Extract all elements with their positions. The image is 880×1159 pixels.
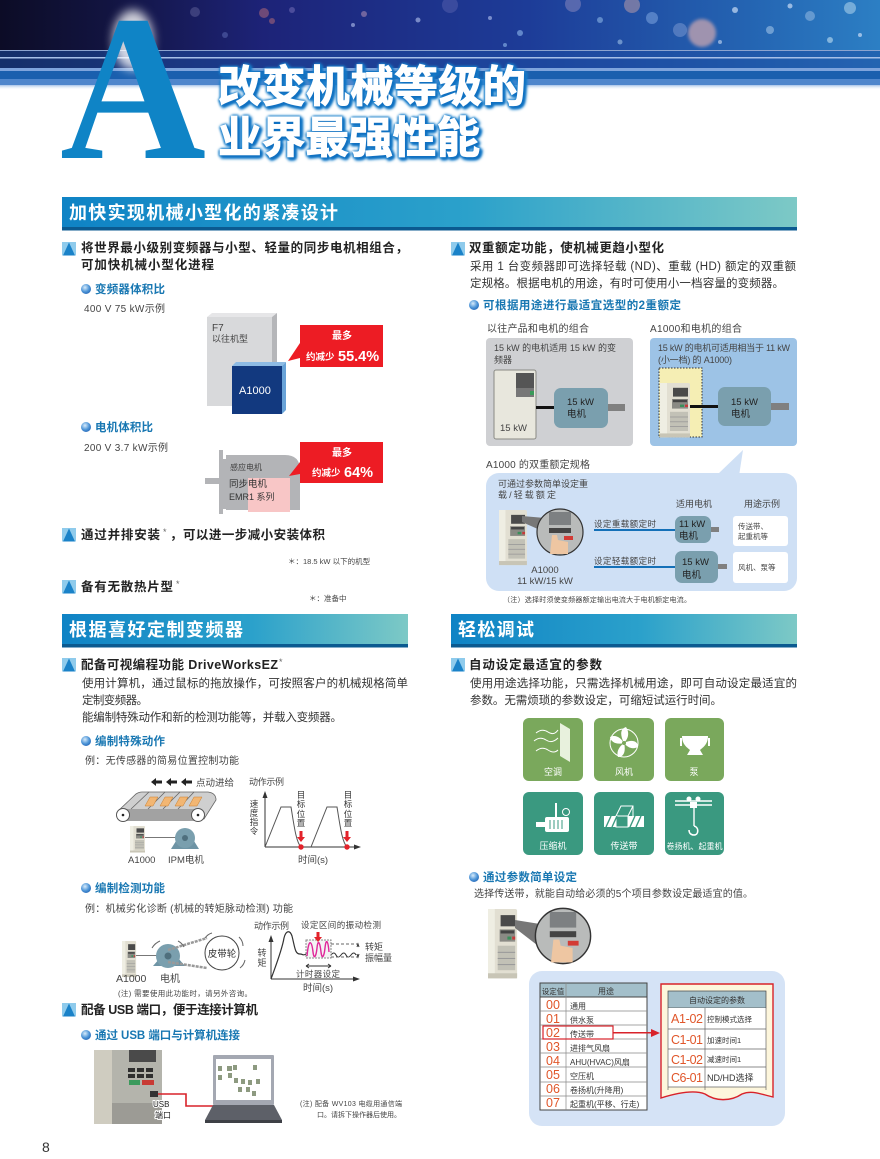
table: application: 通用 [570,1001,586,1011]
panel: A1000 dual rating spec: 15 kW [682,557,709,568]
panel: side by side mounting: ＊：18.5 kW 以下的机型 [288,556,371,566]
panel: conventional combination: 15 kW [500,423,527,434]
tile: crane: 卷扬机、起重机 [666,841,722,851]
illustration: USB connection: 端口 [155,1110,171,1120]
subheading: inverter volume: 变频器体积比 [95,282,166,296]
subheading: simple parameter setting [469,870,753,900]
panel: A1000 dual rating spec [486,450,797,591]
panel: world smallest inverter: 将世界最小级别变频器与小型、轻量的同步电机相组合， [81,240,408,255]
chart: torque detection: 转 [257,947,267,958]
chart: torque detection: 计时器设定 [296,969,340,979]
chart: motor volume comparison [205,450,300,514]
panel: DriveWorksEZ: 定制变频器。 [82,693,148,707]
panel: conventional combination: 频器 [494,354,512,365]
subheading: simple parameter setting: 选择传送带，就能自动给必须的5个项目参数设定最适宜的值。 [474,887,753,900]
panel: conventional combination: 15 kW 的电机适用 15 kW 的变 [494,342,616,353]
table: auto-set parameters: ND/HD选择 [707,1072,754,1083]
chart: speed profile: 目 [344,790,352,800]
table: auto-set parameters: C6-01 [671,1071,703,1085]
subheading: special motion [81,734,239,767]
panel: DriveWorksEZ: * [279,657,283,667]
callout: 64%: 64% [344,465,373,481]
panel: A1000 dual rating spec: 适用电机 [676,498,712,509]
panel: A1000 dual rating spec: 可通过参数简单设定重 [498,478,588,489]
subheading: special motion: 例：无传感器的简易位置控制功能 [85,754,239,767]
callout: 55.4% [288,325,383,367]
table: application: 设定值 [542,986,565,996]
panel: A1000 dual rating spec: 电机 [682,569,702,581]
chart: speed profile: 置 [344,818,353,828]
chart: torque detection: 时间(s) [303,982,333,994]
panel: A1000 dual rating spec: 11 kW/15 kW [517,576,573,587]
panel: no heatsink [62,579,346,603]
illustration: inverter keypad [488,908,591,978]
subheading: motor volume: 电机体积比 [95,420,154,434]
subheading: motor volume: 200 V 3.7 kW示例 [84,441,168,454]
subheading: inverter volume: 400 V 75 kW示例 [84,302,165,315]
diagram: conveyor: 点动进给 [196,777,235,789]
callout: 55.4%: 最多 [332,329,352,342]
panel: no heatsink: * [176,579,180,589]
panel: DriveWorksEZ: 使用计算机，通过鼠标的拖放操作，可按照客户的机械规格简单 [82,676,408,690]
table: application: 06 [546,1082,560,1096]
chart: speed profile: 指 [250,817,259,827]
panel: world smallest inverter: 可加快机械小型化进程 [81,257,214,272]
table: application: AHU(HVAC)风扇 [570,1057,630,1067]
panel: A1000 combination: A1000和电机的组合 [650,322,742,335]
title [218,64,526,163]
subheading: simple parameter setting: 通过参数简单设定 [483,870,578,884]
subheading: motor volume [81,420,168,454]
tile: compressor [523,792,583,855]
chart: speed profile: 位 [297,809,306,819]
chart: speed profile: 目 [297,790,305,800]
panel: world smallest inverter [62,240,408,272]
panel: dual rating heading [451,240,796,290]
table: application [540,983,647,1110]
section bar: easy setup: 轻松调试 [458,620,534,640]
subheading: special motion: 编制特殊动作 [95,734,166,748]
chart: speed profile: 置 [297,818,306,828]
title: 改变机械等级的 [218,64,526,112]
chart: speed profile: 标 [297,799,306,809]
table: auto-set parameters: 减速时间1 [707,1054,741,1064]
panel: A1000 combination: 15 kW 的电机可适用相当于 11 kW [658,342,790,353]
panel: A1000 dual rating spec: A1000 的双重额定规格 [486,458,590,471]
note: USB [300,1099,402,1119]
callout: 64%: 约减少 [312,467,341,479]
table: auto-set parameters: 加速时间1 [707,1035,741,1045]
table: application: 01 [546,1012,560,1026]
tile: pump [665,718,724,781]
chart: speed profile: 时间(s) [298,854,328,866]
subheading: dual rating: 可根据用途进行最适宜选型的2重额定 [483,298,682,312]
panel: A1000 dual rating spec: 11 kW [679,519,705,530]
illustration: USB connection [94,1050,282,1124]
page number: 8 [42,1139,50,1155]
diagram: conveyor [116,777,235,866]
header banner [0,0,880,90]
diagram: conveyor: A1000 [128,855,155,866]
tile: fan [594,718,654,781]
callout: 55.4%: 55.4% [338,349,379,365]
note: USB: (注) 配备 WV103 电缆用通信端 [300,1099,402,1108]
chart: speed profile: 位 [344,809,353,819]
panel: parameter tables [529,971,785,1126]
panel: auto parameter: 使用用途选择功能，只需选择机械用途，即可自动设定最适宜的 [470,676,797,690]
chart: inverter volume comparison: F7 [212,323,224,334]
subheading: detection: 例：机械劣化诊断 (机械的转矩脉动检测) 功能 [85,902,293,915]
highlight arrow [543,1026,660,1039]
table: auto-set parameters: 自动设定的参数 [689,995,745,1005]
table: application: 00 [546,998,560,1012]
panel: dual rating heading: 定规格。根据电机的用途，有时可使用小一档容量的变频器。 [470,276,784,290]
tile: conveyor: 传送带 [610,840,638,851]
panel: no heatsink: 备有无散热片型 [81,579,173,594]
tile: pump: 泵 [689,767,699,777]
subheading: detection [81,881,293,915]
chart: speed profile: 速 [250,799,259,809]
chart: torque detection: 动作示例 [254,920,289,931]
panel: DriveWorksEZ: 能编制特殊动作和新的检测功能等，并载入变频器。 [82,710,342,724]
illustration: USB connection: USB [153,1100,169,1109]
diagram: conveyor: IPM电机 [168,854,204,866]
table: application: 进排气风扇 [570,1043,610,1053]
chart: torque detection: 矩 [257,957,267,968]
subheading: inverter volume [81,282,166,315]
table: application: 传送带 [570,1029,594,1039]
table: auto-set parameters: C1-01 [671,1033,703,1047]
chart: speed profile: 标 [344,799,353,809]
table: auto-set parameters: 控制模式选择 [707,1014,752,1024]
panel: A1000 combination [650,322,797,446]
panel: A1000 dual rating spec: 传送带、 [738,521,768,531]
chart: speed profile: 度 [250,808,259,818]
chart: inverter volume comparison: 以往机型 [212,333,248,344]
panel: side by side mounting: ，可以进一步减小安装体积 [170,527,325,542]
tile: conveyor [594,792,654,855]
table: auto-set parameters [661,984,773,1100]
tile: air conditioning: 空调 [544,766,562,777]
diagram: motor and pulley: (注) 需要使用此功能时，请另外咨询。 [118,988,252,998]
panel: A1000 dual rating spec: 电机 [679,530,698,542]
panel: conventional combination [486,322,633,446]
chart: torque detection [254,920,392,994]
tile: air conditioning [523,718,583,781]
table: auto-set parameters: C1-02 [671,1053,703,1067]
panel: DriveWorksEZ [62,657,408,724]
panel: conventional combination: 15 kW [567,397,594,408]
panel: auto parameter: 参数。无需烦琐的参数设定，可缩短试运行时间。 [470,693,722,707]
chart: inverter volume comparison [207,313,286,414]
subheading: USB: 通过 USB 端口与计算机连接 [95,1028,240,1042]
panel: conventional combination: 以往产品和电机的组合 [487,322,589,335]
panel: auto parameter [451,657,797,707]
diagram: motor and pulley: 电机 [160,972,180,985]
panel: DriveWorksEZ: 配备可视编程功能 DriveWorksEZ [81,657,278,672]
panel: USB heading: 配备 USB 端口，便于连接计算机 [81,1002,258,1017]
callout: 64% [289,442,383,483]
panel: side by side mounting [62,527,371,566]
section bar: easy setup [451,614,797,648]
chart: speed profile: 令 [250,826,259,836]
panel: dual rating heading: 采用 1 台变频器即可选择轻载 (ND)、重载 (HD) 额定的双重额 [470,259,796,273]
panel: A1000 dual rating spec: A1000 [531,565,559,576]
panel: side by side mounting: * [163,527,167,537]
panel: A1000 dual rating spec: 风机、泵等 [738,562,776,572]
chart: speed profile: 动作示例 [249,776,284,787]
table: auto-set parameters: A1-02 [671,1012,703,1026]
table: application: 07 [546,1096,560,1110]
tile: fan: 风机 [615,766,633,777]
tile: crane [665,792,724,855]
panel: dual rating heading: 双重额定功能，使机械更趋小型化 [469,240,664,255]
note: USB: 口。请拆下操作器后使用。 [317,1110,401,1119]
panel: A1000 dual rating spec: 起重机等 [738,531,768,541]
chart: torque detection: 设定区间的振动检测 [301,920,381,930]
callout: 55.4%: 约减少 [306,351,335,363]
table: application: 04 [546,1054,560,1068]
table: application: 起重机(平移、行走) [570,1099,640,1109]
table: application: 03 [546,1040,560,1054]
section bar: compact design: 加快实现机械小型化的紧凑设计 [69,202,338,223]
chart: motor volume comparison: 同步电机 [229,478,268,490]
chart: torque detection: 转矩 [365,941,383,952]
chart: torque detection: 振幅量 [365,952,392,963]
note: rating: （注）选择时须使变频器额定输出电流大于电机额定电流。 [503,595,691,604]
chart: inverter volume comparison: A1000 [239,385,271,397]
subheading: detection: 编制检测功能 [95,881,166,895]
panel: A1000 combination: 电机 [731,408,750,420]
callout: 64%: 最多 [332,446,352,459]
diagram: motor and pulley: 皮带轮 [208,948,237,960]
section bar: customize [62,614,408,648]
panel: auto parameter: 自动设定最适宜的参数 [469,657,602,672]
panel: A1000 dual rating spec: 用途示例 [744,498,780,509]
diagram: motor and pulley: A1000 [116,973,147,985]
panel: conventional combination: 电机 [567,408,586,420]
table: application: 空压机 [570,1071,594,1081]
chart: motor volume comparison: 感应电机 [230,462,262,472]
panel: A1000 dual rating spec: 设定轻载额定时 [594,556,656,566]
panel: no heatsink: ＊：准备中 [309,593,346,603]
chart: motor volume comparison: EMR1 系列 [229,491,275,502]
section bar: customize: 根据喜好定制变频器 [69,619,243,640]
chart: speed profile [249,776,361,866]
panel: side by side mounting: 通过并排安装 [81,527,160,542]
diagram: motor and pulley [116,933,252,998]
panel: A1000 combination: (小一档) 的 A1000) [658,354,732,365]
tile: compressor: 压缩机 [539,840,567,851]
table: application: 供水泵 [570,1015,594,1025]
panel: A1000 combination: 15 kW [731,397,758,408]
table: application: 05 [546,1068,560,1082]
title: 业界最强性能 [218,115,480,163]
panel: A1000 dual rating spec: 设定重载额定时 [594,519,656,529]
table: application: 用途 [598,986,614,996]
table: application: 02 [546,1026,560,1040]
section bar: compact design [62,197,797,230]
table: application: 卷扬机(升降用) [570,1085,624,1095]
panel: A1000 dual rating spec: 载/轻载额定 [498,489,556,500]
